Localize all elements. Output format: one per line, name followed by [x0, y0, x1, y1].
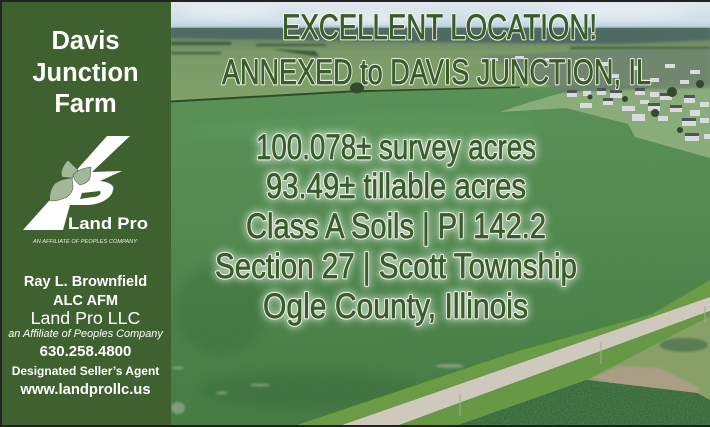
headline	[222, 8, 651, 92]
agent role: Designated Seller’s Agent	[12, 364, 159, 378]
property details	[215, 128, 577, 326]
title: Davis Junction Farm: Davis	[51, 27, 120, 55]
text outline: Section 27 | Scott Township	[215, 247, 577, 286]
subdivision lawns	[500, 84, 710, 158]
website: www.landprollc.us	[20, 382, 151, 398]
distant tree lines	[171, 42, 710, 57]
property details: Ogle County, Illinois	[263, 287, 528, 326]
panel: agent sidebar	[2, 2, 171, 425]
farmland southeast corner	[560, 316, 710, 427]
mottled field patches	[190, 111, 540, 140]
property details: 100.078± survey acres	[256, 128, 536, 167]
text glow	[215, 128, 577, 326]
text glow: Ogle County, Illinois	[263, 287, 528, 326]
title: Davis Junction Farm: Farm	[54, 90, 117, 118]
text outline: Ogle County, Illinois	[263, 287, 528, 326]
road-side grass, south	[394, 311, 710, 427]
text glow: Class A Soils | PI 142.2	[246, 207, 546, 246]
main soybean field	[171, 84, 710, 427]
distant farmland	[171, 28, 710, 108]
company affiliation: an Affiliate of Peoples Company	[8, 328, 163, 340]
county road	[336, 297, 710, 427]
property details: 93.49± tillable acres	[266, 167, 526, 206]
text outline: 100.078± survey acres	[256, 128, 536, 167]
clouds	[180, 6, 690, 23]
text outline	[215, 8, 651, 326]
icon: Land Pro logo: Land Pro	[68, 215, 148, 233]
field tree line	[171, 86, 520, 102]
title: Davis Junction Farm: Junction	[32, 58, 139, 86]
text glow: Section 27 | Scott Township	[215, 247, 577, 286]
text glow: 100.078± survey acres	[256, 128, 536, 167]
sky	[171, 2, 710, 29]
road-side grass, north	[291, 280, 710, 427]
utility poles	[460, 306, 705, 416]
aerial photo of farm field	[171, 2, 710, 425]
distant subdivision	[480, 48, 710, 92]
property details: Class A Soils | PI 142.2	[246, 207, 546, 246]
icon: Land Pro logo: AN AFFILIATE OF PEOPLES COMPANY	[32, 239, 137, 245]
subdivision houses	[490, 56, 710, 141]
text outline: EXCELLENT LOCATION!	[282, 8, 597, 47]
title: Davis Junction Farm	[32, 27, 139, 118]
soybean row texture	[212, 91, 388, 400]
phone number: 630.258.4800	[40, 343, 131, 360]
text outline: 93.49± tillable acres	[266, 167, 526, 206]
company name: Land Pro LLC	[31, 308, 140, 328]
icon: Land Pro logo	[23, 136, 148, 245]
text glow: 93.49± tillable acres	[266, 167, 526, 206]
agent credentials: ALC AFM	[53, 293, 118, 309]
crop rows southeast corner	[453, 380, 710, 427]
text outline: Class A Soils | PI 142.2	[246, 207, 546, 246]
agent name: Ray L. Brownfield	[24, 274, 147, 290]
headline: EXCELLENT LOCATION!	[282, 8, 597, 47]
property details: Section 27 | Scott Township	[215, 247, 577, 286]
